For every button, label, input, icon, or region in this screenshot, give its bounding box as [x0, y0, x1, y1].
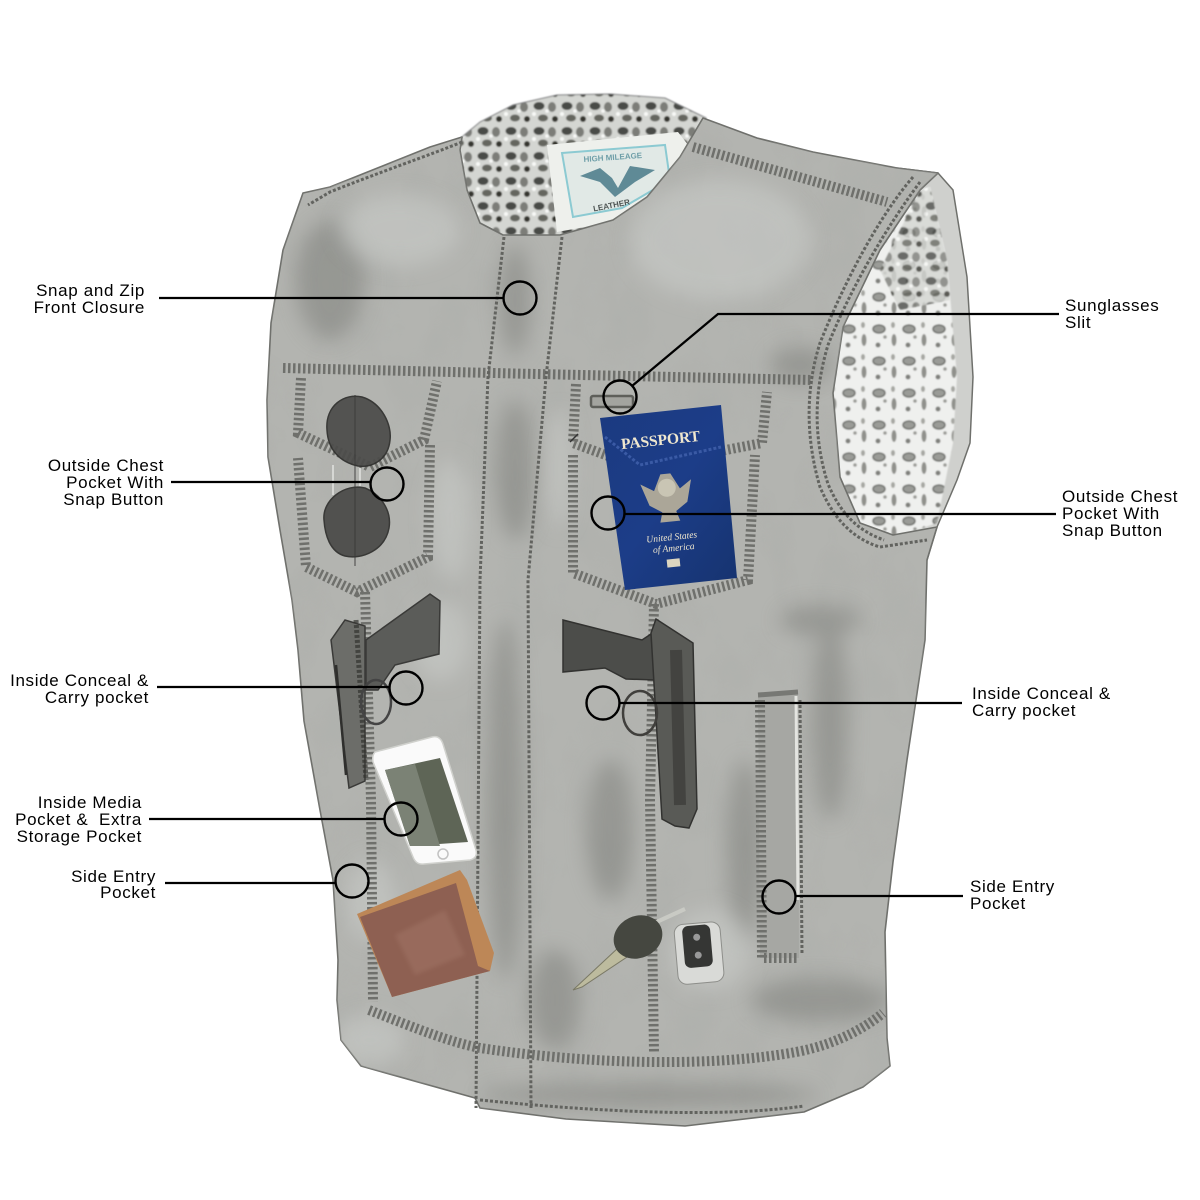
callout: left side entry pocket: Side Entry: [71, 867, 156, 886]
callout: left inside conceal pocket: Carry pocket: [45, 688, 149, 707]
callout: inside media pocket: Pocket & Extra: [15, 810, 142, 829]
stitching: [283, 142, 927, 1113]
callout: sunglasses slit: Slit: [1065, 313, 1091, 332]
callout: left outside chest pocket: Snap Button: [63, 490, 164, 509]
icon: pistol left: [331, 594, 440, 788]
icon: passport: United States: [646, 530, 698, 546]
brand label: [547, 132, 692, 232]
armhole outer back panel: [830, 168, 973, 560]
callout: snap and zip front closure: [34, 281, 536, 317]
callout: right outside chest pocket: Pocket With: [1062, 504, 1160, 523]
callout: right outside chest pocket: Outside Chest: [1062, 487, 1178, 506]
callout: right outside chest pocket: Snap Button: [1062, 521, 1163, 540]
callout: inside media pocket: Inside Media: [38, 793, 142, 812]
callout: right side entry pocket: Pocket: [970, 894, 1026, 913]
brand label: HIGH MILEAGE: [583, 151, 643, 164]
brand label: LEATHER: [592, 198, 631, 214]
callout: left outside chest pocket: Outside Chest: [48, 456, 164, 475]
callout: sunglasses slit: Sunglasses: [1065, 296, 1159, 315]
icon: sunglasses: [324, 395, 390, 566]
callout: right outside chest pocket: [592, 487, 1178, 540]
icon: passport: [600, 405, 737, 590]
callout: sunglasses slit: [604, 296, 1159, 414]
vest inner collar lining: [455, 94, 706, 240]
callout: right inside conceal pocket: Carry pocket: [972, 701, 1076, 720]
sunglasses slit: [570, 396, 633, 442]
right chest pocket stitching: [573, 384, 767, 604]
callout: left side entry pocket: Pocket: [100, 883, 156, 902]
icon: wallet: [357, 870, 494, 997]
callout: inside media pocket: Storage Pocket: [17, 827, 142, 846]
key fob: [674, 921, 725, 985]
right side entry pocket: [758, 692, 802, 958]
leather shading: [260, 110, 980, 1130]
callout: snap and zip front closure: Front Closure: [34, 298, 145, 317]
vest illustration: [260, 94, 980, 1130]
icon: passport: PASSPORT: [620, 428, 701, 453]
icon: smartphone: [373, 737, 476, 864]
vest body: [267, 118, 938, 1126]
callout: snap and zip front closure: Snap and Zip: [36, 281, 145, 300]
icon: passport: of America: [652, 541, 695, 556]
icon: car keys: [573, 907, 725, 990]
callout: right side entry pocket: [762, 877, 1055, 914]
passport emblem: [639, 471, 695, 524]
icon: pistol right: [563, 619, 697, 828]
callout: inside media pocket: [15, 793, 418, 846]
callout: left outside chest pocket: Pocket With: [66, 473, 164, 492]
callout: right inside conceal pocket: [586, 684, 1111, 720]
left chest pocket stitching: [298, 378, 437, 592]
callout: left inside conceal pocket: Inside Conceal &: [10, 671, 149, 690]
callout: left outside chest pocket: [48, 456, 404, 509]
callout: left side entry pocket: [71, 864, 368, 902]
callout: left inside conceal pocket: [10, 671, 422, 707]
callout: right inside conceal pocket: Inside Conceal &: [972, 684, 1111, 703]
armhole paisley lining: [833, 187, 957, 538]
callout: right side entry pocket: Side Entry: [970, 877, 1055, 896]
